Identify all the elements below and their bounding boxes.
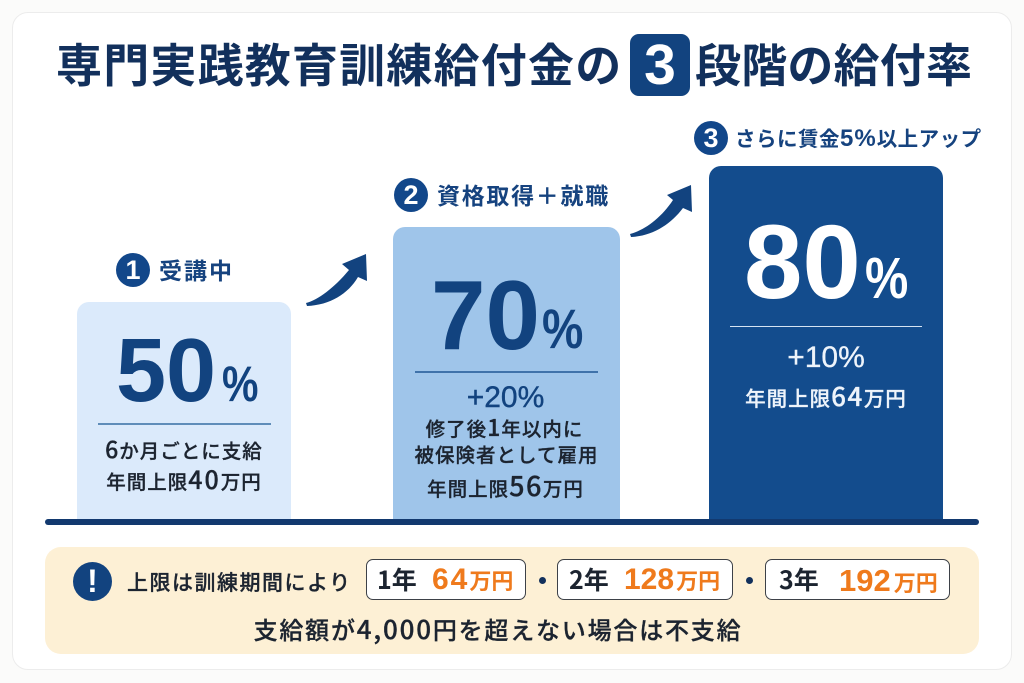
pill: 3 years: 3年 (779, 561, 819, 597)
title: 段階の給付率 (695, 30, 972, 96)
notice panel (45, 547, 979, 654)
step 3 label: さらに賃金5%以上アップ (735, 122, 982, 152)
icon: exclamation (73, 562, 112, 601)
arrow 2 (630, 185, 692, 237)
step 1 label: 1 (125, 255, 141, 285)
badge: 3 (630, 34, 690, 96)
pill: 2 years (557, 559, 733, 600)
pill: 2 years: 128万円 (624, 563, 720, 596)
notice lead text: 上限は訓練期間により (127, 567, 352, 597)
pill: 1 year: 64万円 (432, 563, 513, 596)
baseline (45, 519, 979, 525)
pill: 2 years: 2年 (569, 561, 609, 597)
+20%: +20% (467, 381, 544, 414)
bar 2 cap: 年間上限56万円 (427, 465, 584, 504)
rate 80%: 80 (744, 204, 861, 321)
step 2 label: 資格取得＋就職 (437, 177, 610, 211)
rate 80%: % (865, 246, 908, 311)
badge: 3: 3 (644, 33, 676, 97)
bar 2: 70% (393, 227, 620, 520)
pill: 1 year: 1年 (377, 561, 417, 597)
title (56, 30, 972, 97)
rate 50%: % (222, 356, 258, 412)
bar 2 details: 被保険者として雇用 (415, 439, 598, 468)
bar 3 cap: 年間上限64万円 (745, 377, 907, 414)
pill: 1 year (366, 559, 526, 600)
arrow 1 (306, 254, 367, 306)
bar 3: 80% (709, 166, 943, 520)
bar 2 details: 修了後1年以内に (426, 409, 583, 443)
dot separators (539, 577, 546, 584)
notice footnote: 支給額が4,000円を超えない場合は不支給 (254, 610, 742, 647)
title: 専門実践教育訓練給付金の (56, 30, 622, 96)
step 2 label: 2 (403, 180, 419, 210)
step 1 label: 受講中 (159, 252, 234, 286)
bar 1: 50% (77, 302, 291, 520)
pill: 3 years: 192万円 (839, 563, 938, 598)
rate 70%: 70 (431, 260, 540, 370)
+10%: +10% (787, 341, 865, 374)
pill: 3 years (765, 559, 950, 600)
bar 2 details (414, 409, 598, 468)
icon: exclamation: ! (87, 563, 98, 599)
rate 50%: 50 (116, 321, 216, 421)
rate 70%: % (542, 297, 583, 360)
step 1 label (116, 252, 234, 287)
bar 1 details: 6か月ごとに支給 (105, 431, 263, 465)
bar 1 cap: 年間上限40万円 (106, 461, 262, 497)
step 3 label: 3 (703, 123, 719, 153)
